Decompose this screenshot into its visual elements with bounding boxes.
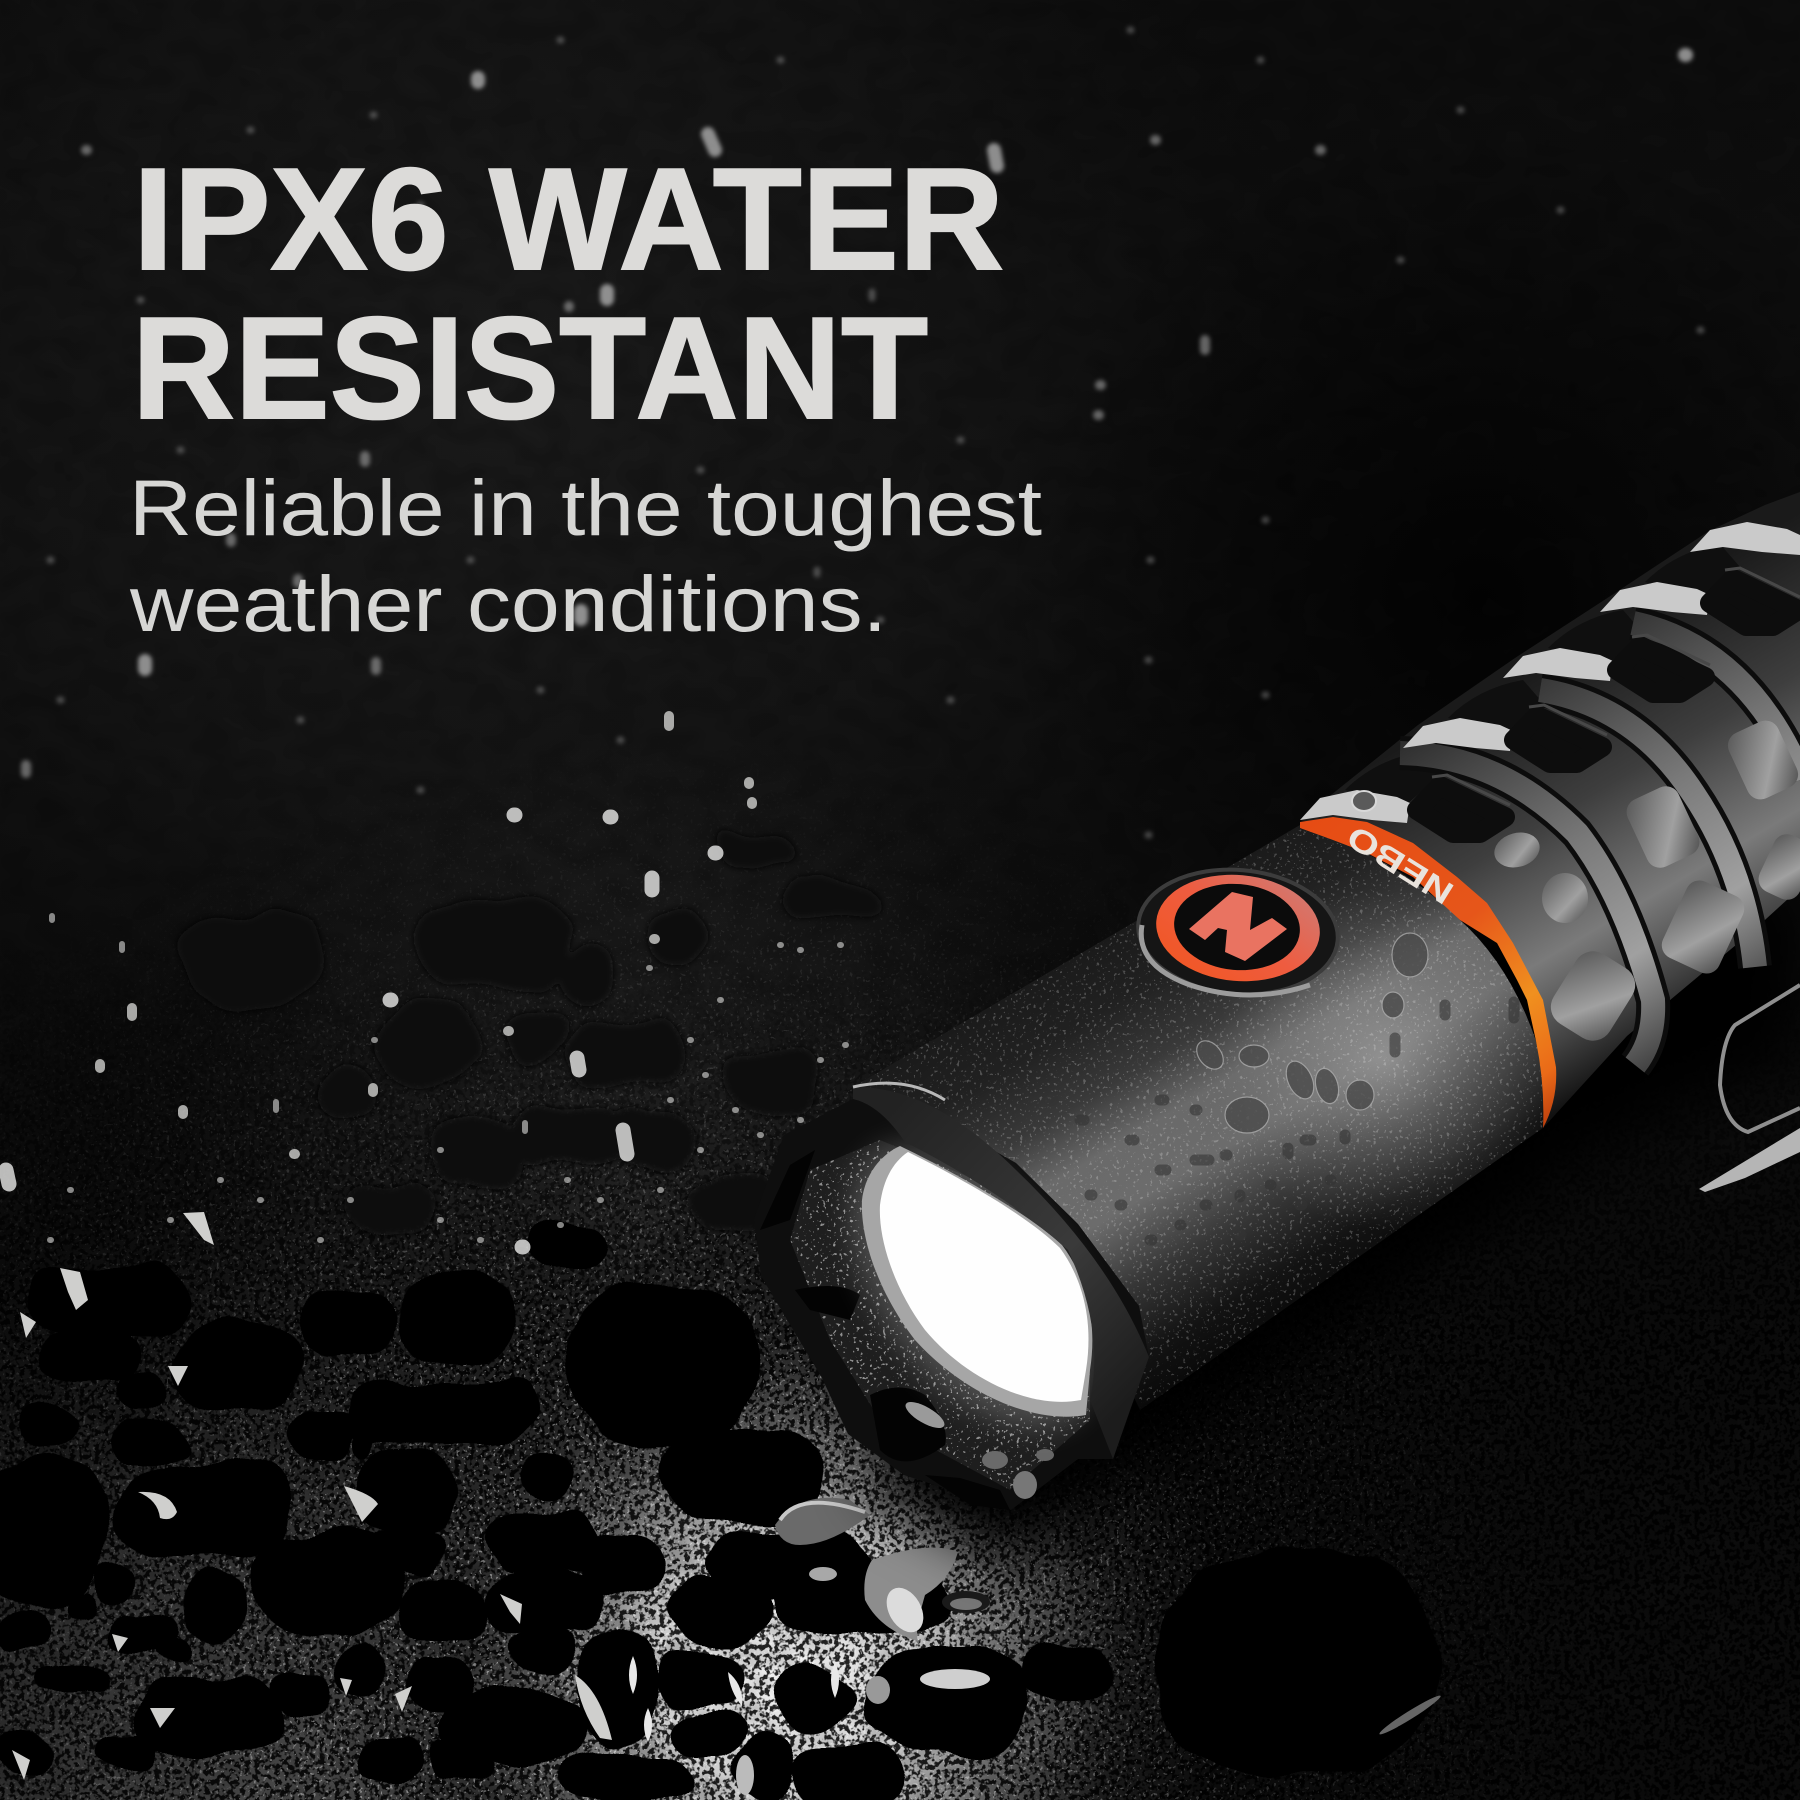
grip section xyxy=(1300,492,1800,1128)
grip base xyxy=(1300,492,1800,1128)
grip ring outlines xyxy=(1400,623,1800,1065)
heading xyxy=(132,138,1004,449)
lens light xyxy=(880,1152,1088,1402)
orange band xyxy=(1300,817,1556,1128)
soft puddles in mid ground xyxy=(225,847,869,1207)
rim highlight xyxy=(853,1083,945,1100)
subheading xyxy=(129,463,1042,648)
subheading line 1: Reliable in the toughest xyxy=(129,463,1042,552)
large water beads xyxy=(1191,933,1428,1133)
crenellated bezel xyxy=(754,1099,1149,1510)
bezel sparkle texture xyxy=(790,1140,1090,1488)
lens ring xyxy=(862,1146,1092,1417)
dark shoulders between strips xyxy=(1345,544,1740,806)
bezel droplets xyxy=(902,1397,1054,1499)
flashlight xyxy=(754,492,1800,1520)
pad top highlights xyxy=(1432,568,1800,805)
housing light edge xyxy=(1141,925,1310,995)
bezel textured face xyxy=(790,1140,1090,1490)
blurred water droplets on background xyxy=(26,30,1701,835)
power button xyxy=(1133,862,1343,1002)
shiny water droplet highlights xyxy=(12,1212,612,1780)
water puddles on surface xyxy=(15,1244,1328,1782)
NEBO brand text: NEBO xyxy=(1340,818,1460,912)
lens glow xyxy=(800,1096,1150,1474)
body highlight and water beads xyxy=(850,820,1560,1420)
pocket clip outline xyxy=(1699,985,1800,1192)
black rubber pads xyxy=(1417,579,1798,833)
heading line 2: RESISTANT xyxy=(132,287,928,449)
sharp water droplets in middle ground xyxy=(6,716,846,1247)
bright bead drop and reflection xyxy=(775,1498,990,1642)
N logo xyxy=(1189,892,1287,961)
flashlight head xyxy=(754,1083,1150,1520)
grip rings xyxy=(1400,623,1800,1065)
flashlight shadow xyxy=(860,880,1800,1560)
button face xyxy=(1170,879,1304,975)
subheading line 2: weather conditions. xyxy=(129,559,887,648)
reflection on large puddle xyxy=(736,1669,1443,1795)
gray rubber pads xyxy=(1490,716,1800,1048)
small beads shadow xyxy=(1050,1002,1514,1240)
bright droplet glints xyxy=(629,1656,839,1742)
button housing xyxy=(1133,862,1343,1002)
dark notches on bezel xyxy=(760,1150,1010,1510)
orange ring xyxy=(1152,868,1324,988)
small water bead on strip xyxy=(1352,791,1376,811)
flashlight body xyxy=(853,825,1544,1410)
heading line 1: IPX6 WATER xyxy=(133,138,1004,300)
front rim xyxy=(853,1087,1149,1459)
light strips xyxy=(1300,522,1800,823)
